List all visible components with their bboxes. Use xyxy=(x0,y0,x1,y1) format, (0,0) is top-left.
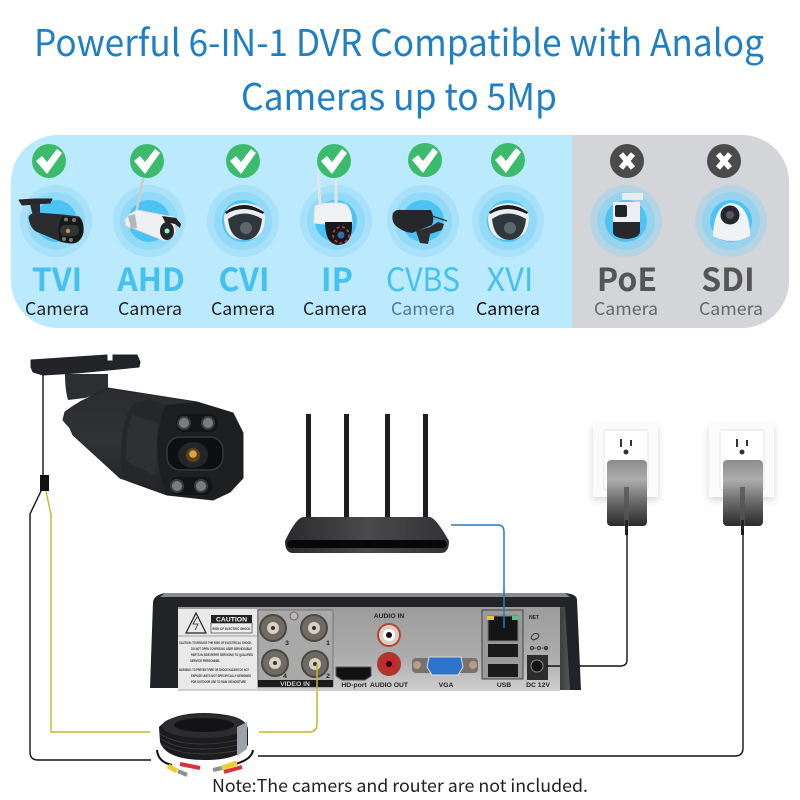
DC port xyxy=(526,615,550,689)
video in panel: 1 xyxy=(326,640,330,647)
camera type: IP: Camera xyxy=(303,295,367,321)
VGA port xyxy=(412,657,478,689)
DVR shell xyxy=(150,593,581,690)
camera type: PoE xyxy=(590,144,662,321)
body xyxy=(63,388,243,500)
LAN USB block xyxy=(482,610,523,689)
camera type: TVI: TVI xyxy=(32,255,82,301)
camera type: TVI xyxy=(19,144,92,321)
camera type: CVBS: CVBS xyxy=(386,255,460,301)
DC port: NET xyxy=(529,615,539,621)
title: Cameras up to 5Mp xyxy=(241,67,557,121)
camera type: XVI xyxy=(472,143,544,321)
caution label: FOR OUTDOOR USE TO RAIN OR MOISTURE xyxy=(191,680,246,684)
video in panel: 3 xyxy=(285,640,289,647)
camera type: PoE: Camera xyxy=(594,295,658,321)
connectors xyxy=(168,766,177,771)
title: Powerful 6-IN-1 DVR Compatible with Analog xyxy=(34,13,764,67)
camera type: XVI: XVI xyxy=(486,255,534,301)
front ring xyxy=(121,399,165,487)
metal plate xyxy=(178,607,560,691)
camera type: CVI xyxy=(207,144,279,321)
panel background: supported xyxy=(11,135,572,328)
panel background: unsupported xyxy=(572,135,789,328)
video in panel: 4 xyxy=(283,673,287,680)
DC port: ⊖-⊙-⊕ xyxy=(529,646,549,652)
ethernet cable xyxy=(451,525,504,625)
camera type: AHD xyxy=(113,144,185,321)
note: Note:The camers and router are not included. xyxy=(212,773,588,798)
router body xyxy=(285,517,449,553)
camera type: AHD: Camera xyxy=(118,295,182,321)
camera type: SDI: SDI xyxy=(701,255,755,301)
audio ports: AUDIO OUT xyxy=(370,682,409,689)
LED strips xyxy=(176,414,218,432)
DVR rear panel xyxy=(150,593,581,691)
adapter xyxy=(607,460,647,526)
caution label: SERVICE PERSONNEL xyxy=(190,659,220,663)
front face xyxy=(157,402,243,500)
large bullet camera xyxy=(31,355,243,500)
power outlet right xyxy=(709,423,774,535)
camera type: AHD: AHD xyxy=(116,255,185,301)
caution label: DO NOT OPEN COVERS.NO USER SERVICEABLE xyxy=(191,647,252,651)
caution label: CAUTION xyxy=(216,616,247,624)
panel: camera compatibility xyxy=(11,135,789,328)
camera type: IP xyxy=(300,144,372,321)
caution label: CAUTION: TO REDUCE THE RISK OF ELECTRICAL SHOCK, xyxy=(179,641,252,645)
camera type: PoE: PoE xyxy=(597,255,657,301)
camera type: CVI: Camera xyxy=(211,295,275,321)
caution label: WARNING: TO PREVENT FIRE OR SHOCK HAZARD DO NOT xyxy=(179,668,249,672)
audio ports xyxy=(370,613,409,689)
video in panel xyxy=(258,610,333,688)
camera type: IP: IP xyxy=(321,255,353,301)
video in panel: VIDEO IN xyxy=(280,681,310,688)
caution label: EXPOSE UNITS NOT SPECIFICALLY DESIGNED xyxy=(191,674,251,678)
mount plate xyxy=(31,355,140,375)
camera type: CVI: CVI xyxy=(218,255,270,301)
power outlet left xyxy=(593,423,658,535)
DC port: DC 12V xyxy=(526,682,550,689)
adapter xyxy=(723,460,763,526)
camera type: CVBS xyxy=(386,143,460,321)
router xyxy=(285,414,449,553)
caution label: PARTS IN SIDE.REFER SERVICING TO QUALIFIED xyxy=(191,653,253,657)
LAN USB block: USB xyxy=(497,682,511,689)
cable coil xyxy=(157,713,253,775)
video in panel: 2 xyxy=(326,673,330,680)
cable ends over DVR xyxy=(317,590,560,690)
HDMI port: HD-port xyxy=(341,682,367,689)
camera type: SDI: Camera xyxy=(699,295,763,321)
VGA port: VGA xyxy=(439,682,453,689)
neck xyxy=(65,374,108,400)
antennas xyxy=(306,414,428,518)
camera type: SDI xyxy=(695,144,767,321)
HDMI port xyxy=(336,667,371,689)
title xyxy=(34,13,764,121)
LEDs xyxy=(171,417,214,492)
camera type: TVI: Camera xyxy=(25,295,89,321)
caution label: RISK OF ELECTRIC SHOCK xyxy=(212,627,251,631)
yellow video wire xyxy=(259,664,317,732)
audio ports: AUDIO IN xyxy=(374,613,404,620)
lens housing xyxy=(167,437,223,470)
wires: camera to cable xyxy=(30,375,151,760)
camera type: XVI: Camera xyxy=(476,295,540,321)
power wires xyxy=(258,530,743,756)
camera type: CVBS: Camera xyxy=(391,295,455,321)
caution label xyxy=(178,609,257,689)
